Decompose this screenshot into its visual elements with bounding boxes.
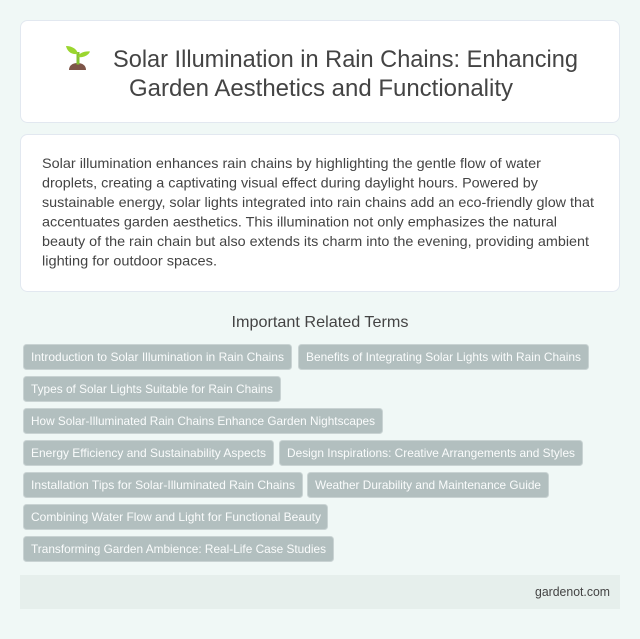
chip: weather: [308, 472, 548, 498]
chip: nightscapes: How Solar-Illuminated Rain Chains Enhance Garden Nightscapes: [31, 414, 375, 428]
description text: lighting for outdoor spaces.: [42, 252, 217, 268]
chip: transforming: Transforming Garden Ambience: Real-Life Case Studies: [31, 542, 326, 556]
chip: installation: Installation Tips for Solar-Illuminated Rain Chains: [31, 478, 295, 492]
heading: related terms: Important Related Terms: [232, 314, 408, 331]
chip: combining: [24, 504, 328, 530]
chip: installation: [24, 472, 302, 498]
chip: energy: [24, 440, 274, 466]
footer bar: [20, 575, 620, 609]
chip: types: Types of Solar Lights Suitable for Rain Chains: [31, 382, 273, 396]
chip: introduction: Introduction to Solar Illumination in Rain Chains: [31, 350, 284, 364]
title: [113, 46, 578, 102]
chip: transforming: [24, 536, 334, 562]
chip: combining: Combining Water Flow and Light for Functional Beauty: [31, 510, 321, 524]
chips: related terms: [24, 344, 588, 562]
chip: design: [280, 440, 582, 466]
chip: benefits: Benefits of Integrating Solar Lights with Rain Chains: [306, 350, 581, 364]
description text: sustainable energy, solar lights integrated into rain chains add an eco-friendly glow that: [42, 194, 594, 210]
description text: Solar illumination enhances rain chains by highlighting the gentle flow of water: [42, 155, 541, 171]
title: Garden Aesthetics and Functionality: [129, 75, 513, 102]
chip: energy: Energy Efficiency and Sustainability Aspects: [31, 446, 266, 460]
description text: beauty of the rain chain but also extends its charm into the evening, providing ambient: [42, 233, 589, 249]
description text: [42, 155, 594, 268]
chip: nightscapes: [24, 408, 382, 434]
title: Solar Illumination in Rain Chains: Enhancing: [113, 46, 578, 73]
footer source: gardenot.com: [535, 585, 610, 599]
chip: weather: Weather Durability and Maintenance Guide: [315, 478, 541, 492]
panel: description: [20, 134, 620, 292]
description text: accentuates garden aesthetics. This illumination not only emphasizes the natural: [42, 214, 557, 230]
chip: design: Design Inspirations: Creative Arrangements and Styles: [287, 446, 575, 460]
panel: title card: [20, 20, 620, 122]
chip: introduction: [24, 344, 292, 370]
icon: seedling: [66, 46, 90, 70]
description text: droplets, creating a captivating visual effect during daylight hours. Powered by: [42, 174, 538, 190]
chip: benefits: [298, 344, 588, 370]
chip: types: [24, 376, 280, 402]
